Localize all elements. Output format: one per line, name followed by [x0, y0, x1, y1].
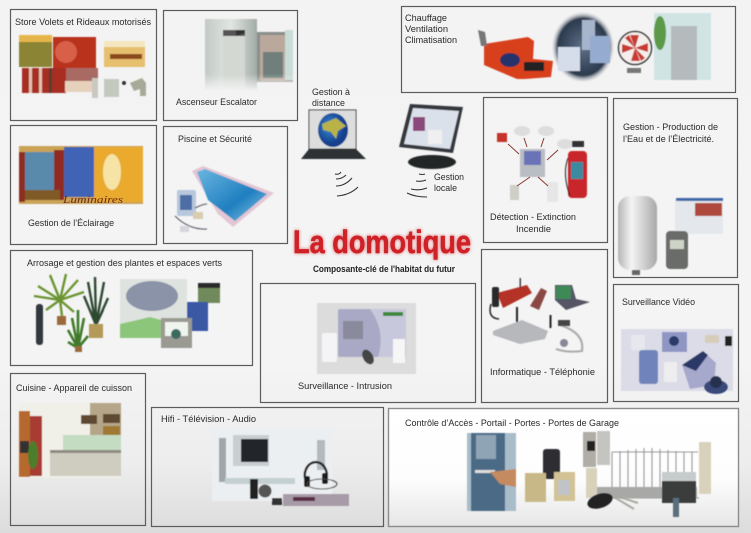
heading: detection: Incendie: [516, 224, 551, 234]
image: water heater: [618, 196, 657, 275]
panel: chauffage: [402, 6, 736, 92]
image: fire detection: [497, 126, 587, 202]
group: gestion locale: [399, 104, 464, 197]
image: card door: [467, 433, 516, 511]
heading: chauffage: [405, 13, 457, 45]
panel: eclairage: [10, 126, 156, 244]
heading: gestion locale: locale: [434, 183, 457, 193]
panel: ascenseur: [164, 10, 298, 120]
image: store collage: [19, 35, 146, 98]
image: luminaires: [19, 146, 143, 204]
arrows: [508, 138, 558, 186]
panel: controle d'acces: [388, 408, 739, 527]
heading: gestion a distance: Gestion à: [312, 87, 351, 97]
subtitle: Composante-clé de l'habitat du futur: [313, 264, 455, 275]
heading: production: l’Eau et de l’Électricité.: [623, 134, 714, 144]
heading: production: [623, 122, 718, 144]
image: keys: [585, 490, 638, 512]
heading: cuisine: Cuisine - Appareil de cuisson: [16, 383, 132, 393]
text: luminaires: Luminaires: [62, 194, 123, 206]
icon: laptop with globe: [301, 110, 366, 159]
image: readers: [525, 449, 575, 502]
image: video surveillance: [621, 329, 733, 394]
panel: cuisine: [10, 374, 146, 526]
icon: signal waves: [407, 174, 427, 197]
heading: chauffage: Ventilation: [405, 24, 448, 34]
image: kitchen: [19, 403, 121, 478]
image: sprinkler: [120, 279, 220, 348]
panel: arrosage: [10, 250, 252, 366]
heading: chauffage: Chauffage: [405, 13, 447, 23]
heading: production: Gestion - Production de: [623, 122, 718, 132]
heading: piscine: Piscine et Sécurité: [178, 134, 252, 144]
heading: store: Store Volets et Rideaux motorisés: [15, 17, 151, 27]
image: boiler: [478, 30, 553, 79]
image: radiators: [552, 12, 614, 82]
image: air conditioner: [654, 13, 711, 80]
panel: production: [614, 98, 738, 278]
heading: gestion a distance: distance: [312, 98, 345, 108]
heading: gestion locale: Gestion: [434, 172, 464, 182]
heading: chauffage: Climatisation: [405, 35, 457, 45]
panel: surveillance intrusion: [260, 284, 476, 402]
title: [293, 224, 471, 275]
panel: detection: [484, 98, 608, 242]
image: elevator: [205, 19, 295, 91]
heading: video: Surveillance Vidéo: [622, 297, 695, 307]
panel: hifi: [152, 408, 384, 526]
title: La domotique: [293, 224, 471, 260]
heading: ascenseur: Ascenseur Escalator: [176, 97, 257, 107]
image: gate: [583, 431, 711, 517]
panel: store volets et rideaux: [10, 10, 156, 120]
heading: controle: Contrôle d’Accès - Portail - Portes - Portes de Garage: [405, 418, 619, 428]
heading: detection: [490, 212, 576, 234]
image: pool: [175, 166, 274, 232]
heading: arrosage: Arrosage et gestion des plantes et espaces verts: [27, 258, 222, 268]
title: La domotique: [293, 224, 471, 260]
heading: informatique: Informatique - Téléphonie: [490, 367, 595, 377]
image: alarm: [317, 303, 416, 374]
image: phone and router: [490, 278, 590, 352]
image: plants: [34, 274, 108, 352]
image: monitor and meter: [666, 198, 723, 269]
panel: piscine: [164, 126, 288, 244]
heading: gestion a distance: [312, 87, 351, 108]
group: gestion a distance: [301, 87, 366, 196]
heading: eclairage: Gestion de l’Éclairage: [28, 218, 114, 228]
heading: detection: Détection - Extinction: [490, 212, 576, 222]
panel: informatique: [482, 250, 608, 402]
image: hifi: [212, 429, 349, 506]
icon: signal waves: [335, 172, 358, 196]
heading: intrusion: Surveillance - Intrusion: [298, 381, 392, 391]
icon: touch screen: [399, 104, 463, 169]
heading: gestion locale: [434, 172, 464, 193]
icon: fan: [618, 32, 652, 73]
panel: surveillance video: [614, 284, 738, 402]
heading: hifi: Hifi - Télévision - Audio: [161, 414, 256, 424]
